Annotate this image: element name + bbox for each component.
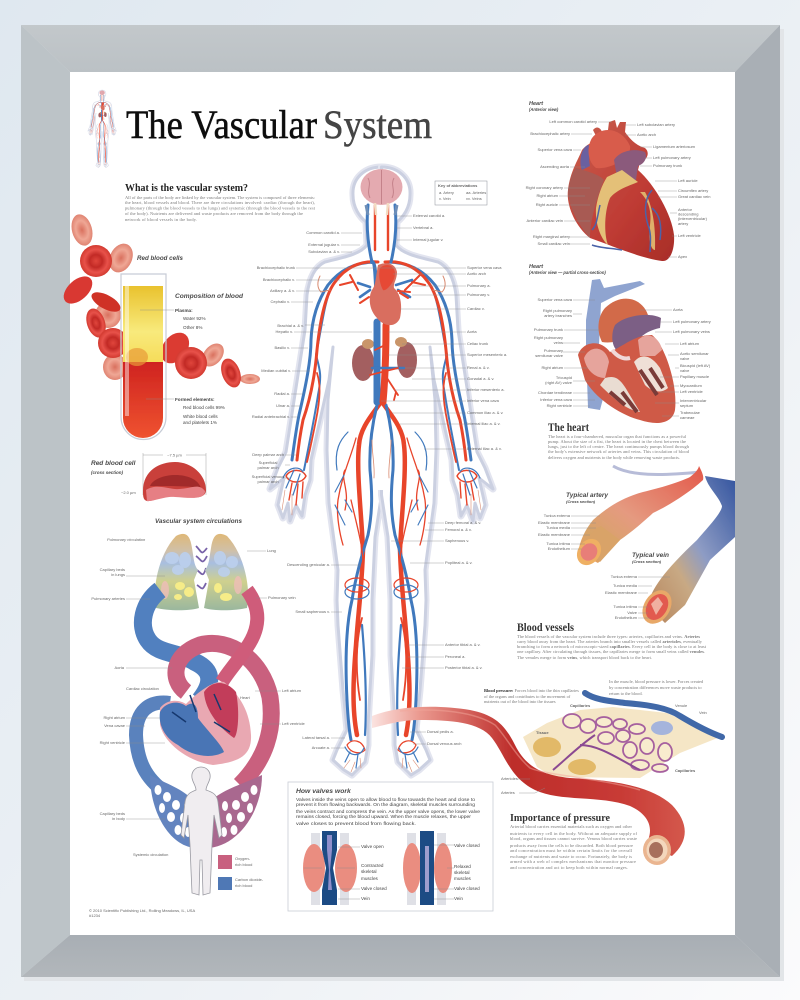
heart cross section: (Anterior view — partial cross-section) (529, 270, 606, 275)
title (126, 102, 432, 147)
intro: what is the vascular system: of the body). Nutrients are delivered and waste products are removed from the body through the (125, 211, 303, 216)
relaxed valve diagram: Relaxed (454, 864, 471, 869)
tissue (523, 707, 720, 778)
red blood cell cross section: ~2.0 µm (121, 490, 136, 495)
figure labels right: Cardiac v. (467, 306, 485, 311)
heart anterior view (526, 101, 710, 261)
figure labels left: Common carotid a. (306, 230, 340, 235)
figure labels right: Anterior tibial a. & v. (445, 642, 480, 647)
figure labels right: Internal jugular v. (413, 237, 443, 242)
composition of blood labels: Formed elements: (175, 397, 215, 402)
heart cross section: Superior vena cava (538, 297, 573, 302)
fat cells (533, 737, 596, 775)
blood vessels text: Blood vessels (517, 622, 574, 634)
circulation labels: Systemic circulation (133, 852, 168, 857)
artery open end (643, 835, 671, 865)
pressure labels: Blood pressure: Forces blood into the thin capillaries (484, 688, 579, 693)
blood legend (218, 855, 264, 890)
contracted valve diagram (303, 831, 387, 905)
anterior heart leader lines (559, 122, 677, 257)
pressure labels: return to the blood. (609, 691, 643, 696)
importance of pressure text: nutrients to every cell in the body. Without an adequate supply of (510, 831, 638, 836)
key of abbreviations: Key of abbreviations (438, 183, 478, 188)
person outline (181, 767, 222, 895)
heart cross section: carneae (680, 415, 695, 420)
heart cross section: Trabeculae (680, 410, 701, 415)
artery labels: Typical artery (566, 492, 608, 499)
circulation labels: Pulmonary vein (268, 595, 296, 600)
composition of blood labels: White blood cells (183, 414, 218, 419)
circulation labels: Right ventricle (100, 740, 126, 745)
intro: what is the vascular system: All of the parts of the body are linked by the vascular system. The system is composed of three elements: (125, 195, 315, 200)
figure labels left: Descending genicular a. (287, 562, 330, 567)
heart anterior view: Superior vena cava (538, 147, 573, 152)
composition of blood labels: Red blood cells 99% (183, 405, 225, 410)
pressure labels: In the muscle, blood pressure is lower. Forces created (609, 679, 704, 685)
artery labels: Tunica media (546, 525, 571, 530)
vein labels: Tunica media (613, 583, 638, 588)
red blood cells behind tube (59, 212, 260, 390)
cross-section heart illustration (578, 279, 675, 423)
artery labels: Elastic membrane (538, 532, 571, 537)
composition of blood labels: Composition of blood (175, 293, 244, 300)
key of abbreviations (435, 181, 487, 205)
heart cross section: Aorta (673, 307, 683, 312)
contracted valve diagram: Valve open (361, 844, 384, 849)
figure labels left: Lateral tarsal a. (302, 735, 330, 740)
circulation labels: Capillary beds (100, 811, 125, 816)
vascular system circulations diagram: Vascular system circulations (155, 518, 242, 525)
blood vessels text: The venules merge to form veins, which transport blood back to the heart. (517, 655, 652, 661)
heart anterior view: Small cardiac vein (538, 241, 570, 246)
composition of blood labels: Other 8% (183, 325, 202, 330)
heart anterior view: Right atrium (536, 193, 559, 198)
figure labels left: Median cubital v. (261, 368, 291, 373)
key of abbreviations: v. Vein (439, 196, 451, 201)
composition of blood labels: and platelets 1% (183, 420, 217, 425)
heart cross section: veins (554, 340, 563, 345)
figure labels right: Inferior mesenteric a. (467, 387, 505, 392)
kidneys (352, 337, 417, 381)
circulation labels: Right atrium (103, 715, 126, 720)
heart cross section: Chordae tendineae (538, 390, 573, 395)
the heart text: pump. About the size of a fist, the heart is located in the chest between the (548, 439, 686, 445)
blood legend: rich blood (235, 862, 252, 867)
importance of pressure text: Importance of pressure (510, 812, 610, 824)
heart anterior view: Left pulmonary artery (653, 155, 691, 160)
heart anterior view: Left auricle (678, 178, 698, 183)
heart anterior view: (Anterior view) (529, 107, 559, 112)
how valves work panel: valve closes to prevent blood from flowing back. (296, 821, 416, 826)
relaxed valve diagram: muscles (454, 876, 472, 881)
main artery (372, 707, 685, 856)
copyright: © 2010 Scientific Publishing Ltd., Rolling Meadows, IL, USA (89, 908, 195, 913)
pressure labels: Venule (675, 703, 688, 708)
heart anterior view: Left common carotid artery (549, 119, 597, 124)
circulation labels (91, 548, 305, 857)
copyright: #1234 (89, 913, 101, 918)
relaxed valve diagram: Valve closed (454, 886, 480, 891)
figure labels left: Radial antebrachial v. (252, 414, 290, 419)
the heart text: the body's extensive network of arteries and veins. This circulation of blood (548, 449, 690, 454)
figure labels right: External carotid a. (413, 213, 445, 218)
circulation labels: in body (112, 816, 125, 821)
circulation labels: Left atrium (282, 688, 302, 693)
pressure labels: by concentration differences move waste products to (609, 685, 702, 690)
artery labels: Endothelium (548, 546, 571, 551)
red blood cell cross section: Red blood cell (91, 460, 136, 467)
lungs (155, 534, 248, 610)
figure labels left: Small saphenous v. (295, 609, 330, 614)
heart cross section: artery branches (544, 313, 572, 318)
heart cross section: Right atrium (541, 365, 564, 370)
circulation labels: Lung (267, 548, 276, 553)
heart anterior view: Right auricle (536, 202, 559, 207)
key of abbreviations: aa. Arteries (466, 190, 486, 195)
figure labels left: Brachiocephalic trunk (257, 265, 295, 270)
figure labels right: Aortic arch (467, 271, 486, 276)
how valves work panel: Valves inside the veins open to allow blood to flow towards the heart and close to (296, 797, 475, 802)
importance of pressure text: and concentration and act to keep both within normal ranges. (510, 865, 628, 870)
intro: what is the vascular system: the heart, blood vessels and blood. There are three circulations involved: cardiac (through the heart), (125, 200, 315, 206)
small body icon (88, 90, 116, 167)
blood vessels text (517, 622, 707, 661)
the heart text: lungs, just to the left of centre. The heart continuously pumps blood through (548, 444, 690, 450)
figure leader lines (285, 216, 466, 748)
the heart text (548, 422, 690, 460)
circulation labels: in lungs (111, 572, 125, 577)
importance of pressure text: products away from the cells to be discarded. Both blood pressure (510, 843, 633, 848)
pressure labels: nutrients out of the blood into the tissues (484, 699, 556, 704)
figure labels right: Superior mesenteric a. (467, 352, 507, 357)
heart diagram (160, 682, 251, 765)
heart anterior view: (interventricular) (678, 216, 708, 221)
heart cross section: Bicuspid (left AV) (680, 363, 711, 368)
figure labels right: Gonadal a. & v. (467, 376, 494, 381)
heart cross section: Aortic semilunar (680, 351, 709, 356)
figure labels right: Common iliac a. & v. (467, 410, 503, 415)
figure labels left: palmar arch (257, 465, 279, 470)
heart cross section: Heart (529, 264, 544, 270)
systemic loop red (176, 643, 271, 785)
brain (360, 169, 402, 215)
anterior heart illustration (568, 120, 674, 261)
figure labels left: Axillary a. & v. (270, 288, 295, 293)
label: red blood cells: Red blood cells (137, 255, 183, 262)
heart cross section: Pulmonary (544, 348, 563, 353)
circulation labels: Left ventricle (282, 721, 305, 726)
pulmonary vein red (222, 590, 257, 682)
importance of pressure text: blood, organs and tissues cannot survive. Venous blood carries waste (510, 836, 637, 842)
artery labels: Elastic membrane (538, 520, 571, 525)
importance of pressure text (510, 812, 638, 870)
circulation labels: Capillary beds (100, 567, 125, 572)
figure labels right: Saphenous v. (445, 538, 469, 543)
vein labels: Tunica externa (611, 574, 638, 579)
title: System (323, 102, 432, 147)
composition of blood labels (140, 293, 244, 425)
heart cross section: Right ventricle (547, 403, 573, 408)
red blood cell cross section: ~7.5 µm (167, 452, 182, 458)
intro: what is the vascular system: What is the vascular system? (125, 183, 248, 194)
central vessels (340, 262, 425, 402)
vein labels: Endothelium (615, 615, 638, 620)
figure labels left: Superficial (259, 460, 277, 465)
figure labels right: Femoral a. & v. (445, 527, 472, 532)
pressure labels: Arterioles (501, 776, 518, 781)
pressure labels: of the organs and contributes to the movement of (484, 694, 571, 699)
figure labels right: Celiac trunk (467, 341, 488, 346)
heart anterior view: Pulmonary trunk (653, 163, 682, 168)
heart cross section: septum (680, 403, 694, 408)
blood pressure illustration (372, 679, 722, 865)
figure labels right (413, 213, 507, 746)
figure labels left (252, 230, 340, 750)
the heart text: The heart (548, 422, 589, 434)
capillary network (563, 714, 672, 772)
intro: what is the vascular system: pulmonary (through the blood vessels to the lungs) and systemic (through the blood vessels to the rest (125, 206, 316, 210)
pressure labels: Vein (699, 710, 707, 715)
heart anterior view: artery (678, 221, 688, 226)
figure labels left: Brachiocephalic v. (263, 277, 295, 282)
figure labels right: Pulmonary v. (467, 292, 490, 297)
blood vessels text: carry blood away from the heart. The arteries branch into smaller vessels called arterioles, eventually (517, 639, 703, 645)
vein across tissue (585, 693, 722, 737)
heart cross section: valve (680, 368, 690, 373)
test tube (121, 274, 166, 440)
blood vessels text: branching to form a network of microscopic-sized capillaries. Every cell in the body is close to at least (517, 644, 707, 649)
figure labels right: Peroneal a. (445, 654, 465, 659)
intro: what is the vascular system: network of blood vessels in the body. (125, 217, 197, 222)
intro: what is the vascular system (125, 183, 316, 222)
capillary beds (150, 775, 262, 848)
figure labels left: External jugular v. (308, 242, 340, 247)
vena cava blue (136, 703, 170, 792)
the heart text: The heart is a four-chambered, muscular organ that functions as a powerful (548, 434, 687, 440)
figure labels left: Hepatic v. (276, 329, 293, 334)
pressure labels: Capillaries (675, 768, 696, 773)
how valves work panel (288, 782, 493, 911)
figure labels right: Vertebral a. (413, 225, 433, 230)
figure labels right: Dorsal pedis a. (427, 729, 454, 734)
vein labels (605, 552, 670, 620)
how valves work panel: prevent it from flowing backwards. On the diagram, skeletal muscles surrounding (296, 802, 475, 807)
vein labels: Typical vein (632, 552, 669, 559)
typical vein (605, 476, 735, 629)
heart anterior view: Heart (529, 101, 544, 107)
heart cross section: Right pulmonary (543, 308, 572, 313)
heart cross section: (right AV) valve (545, 380, 573, 385)
heart anterior view: Brachiocephalic artery (530, 131, 570, 136)
key of abbreviations: a. Artery (439, 190, 454, 195)
vein labels: (Cross section) (632, 559, 662, 564)
contracted valve diagram: skeletal (361, 869, 377, 874)
figure labels right: Inferior vena cava (467, 398, 500, 403)
contracted valve diagram: Contracted (361, 863, 384, 868)
heart cross section: Left pulmonary artery (673, 319, 711, 324)
vascular system circulations diagram (91, 518, 305, 895)
figure labels right: Renal a. & v. (467, 365, 490, 370)
relaxed valve diagram: Valve closed (454, 843, 480, 848)
importance of pressure text: and concentration must be within certain limits for the overall (510, 848, 633, 853)
figure labels right: Posterior tibial a. & v. (445, 665, 482, 670)
copyright (89, 908, 195, 918)
pressure labels: Capillaries (570, 703, 591, 708)
contracted valve diagram: muscles (361, 876, 379, 881)
heart anterior view: Right coronary artery (526, 185, 563, 190)
vein labels: Elastic membrane (605, 590, 638, 595)
red blood cell cross section: (cross section) (91, 470, 124, 475)
heart cross section: semilunar valve (535, 353, 564, 358)
blood legend: Oxygen- (235, 856, 251, 861)
vein labels: Valve (627, 610, 638, 615)
figure labels right: Dorsal venous arch (427, 741, 461, 746)
body silhouette (270, 167, 493, 775)
heart cross section: Interventricular (680, 398, 707, 403)
circulation labels: Cardiac circulation (126, 686, 159, 691)
artery labels: Tunica intima (546, 541, 571, 546)
heart cross section: Pulmonary trunk (534, 327, 563, 332)
heart anterior view: Aortic arch (637, 132, 656, 137)
heart anterior view: Right marginal artery (533, 234, 570, 239)
heart anterior view: Ascending aorta (540, 164, 570, 169)
artery labels: (Cross section) (566, 499, 596, 504)
heart cross section: Myocardium (680, 383, 702, 388)
heart cross section: Left ventricle (680, 389, 703, 394)
the heart text: delivers oxygen and nutrients to the body while removing waste products. (548, 455, 680, 460)
typical artery (538, 466, 703, 570)
blood legend: Carbon dioxide- (235, 877, 264, 882)
figure labels left: Subclavian a. & v. (308, 249, 340, 254)
importance of pressure text: Arterial blood carries essential materials such as oxygen and other (510, 824, 633, 829)
heart cross section: Left atrium (680, 341, 700, 346)
blood vessels text: The blood vessels of the vascular system include three types: arteries, capillaries and veins. Arteries (517, 634, 700, 640)
figure labels right: Pulmonary a. (467, 283, 491, 288)
title: The Vascular (126, 102, 317, 147)
pulmonary artery blue (143, 590, 209, 700)
figure labels left: Basilic v. (275, 345, 290, 350)
heart anterior view: Left ventricle (678, 233, 701, 238)
relaxed valve diagram: Vein (454, 896, 463, 901)
blood vessels text: one capillary. After circulating through tissues, the capillaries merge to form small veins called venules. (517, 649, 705, 655)
main body figure with vessels (270, 167, 493, 775)
pressure labels: Tissue (536, 730, 549, 735)
red blood cell cross section (91, 452, 206, 501)
heart anterior view: Anterior cardiac vein (527, 218, 563, 223)
key of abbreviations: vv. Veins (466, 196, 482, 201)
composition of blood labels: Water 92% (183, 316, 206, 321)
poster content (59, 72, 735, 935)
figure labels left: Brachial a. & v. (277, 323, 304, 328)
figure labels left: palmar arch (257, 479, 279, 484)
figure labels right: Superior vena cava (467, 265, 502, 270)
figure labels left: Superficial venous (252, 474, 284, 479)
heart anterior view: Great cardiac vein (678, 194, 710, 199)
contracted valve diagram: Valve closed (361, 886, 387, 891)
heart anterior view: Left subclavian artery (637, 122, 675, 127)
figure labels right: Deep femoral a. & v. (445, 520, 481, 525)
heart anterior view: descending (678, 212, 698, 216)
artery labels (538, 492, 608, 551)
vascular system circulations diagram: Pulmonary circulation (107, 537, 146, 542)
how valves work panel: remains closed, forcing the blood upward. When the muscle relaxes, the upper (296, 814, 472, 819)
figure labels right: Popliteal a. & v. (445, 560, 472, 565)
figure labels right: External iliac a. & v. (467, 446, 502, 451)
how valves work panel: How valves work (296, 788, 352, 795)
cross-section leader lines (563, 300, 679, 416)
figure labels right: Aorta (467, 329, 477, 334)
figure labels right: Internal iliac a. & v. (467, 421, 500, 426)
heart cross section: Inferior vena cava (540, 397, 573, 402)
composition of blood labels: Plasma: (175, 308, 193, 313)
figure labels left: Ulnar a. (276, 403, 290, 408)
figure labels left: Cephalic v. (270, 299, 290, 304)
how valves work panel: the veins contract and compress the vein. As the upper valve opens, the lower valve (296, 809, 480, 814)
heart anterior view: Ligamentum arteriosum (653, 144, 696, 149)
heart cross section: Tricuspid (556, 375, 572, 380)
artery labels: Tunica externa (544, 513, 571, 518)
blood legend: rich blood (235, 883, 252, 888)
pressure labels (484, 679, 707, 795)
figure labels left: Radial a. (274, 391, 290, 396)
heart anterior view: Circumflex artery (678, 188, 708, 193)
circulation labels: Vena cavae (104, 723, 126, 728)
relaxed valve diagram: skeletal (454, 870, 470, 875)
pressure labels: Arteries (501, 790, 515, 795)
central heart (370, 263, 401, 325)
heart cross section (529, 264, 711, 423)
figure labels left: Deep palmar arch (252, 452, 284, 457)
heart cross section: Right pulmonary (534, 335, 563, 340)
relaxed valve diagram (403, 831, 480, 905)
heart cross section: valve (680, 356, 690, 361)
importance of pressure text: exchange of nutrients and waste to occur. Fortunately, the body is (510, 854, 632, 860)
vein labels: Tunica intima (613, 604, 638, 609)
heart cross section: Papillary muscle (680, 374, 710, 379)
vessels half (282, 205, 381, 772)
circulation labels: Aorta (114, 665, 125, 670)
contracted valve diagram: Vein (361, 896, 370, 901)
circulation labels: Heart (240, 695, 251, 700)
figure labels left: Arcuate a. (312, 745, 330, 750)
heart cross section: Left pulmonary veins (673, 329, 710, 334)
heart anterior view: Anterior (678, 207, 693, 212)
importance of pressure text: armed with a web of complex mechanisms that monitor pressure (510, 859, 636, 864)
circulation labels: Pulmonary arteries (91, 596, 125, 601)
heart anterior view: Apex (678, 254, 687, 259)
